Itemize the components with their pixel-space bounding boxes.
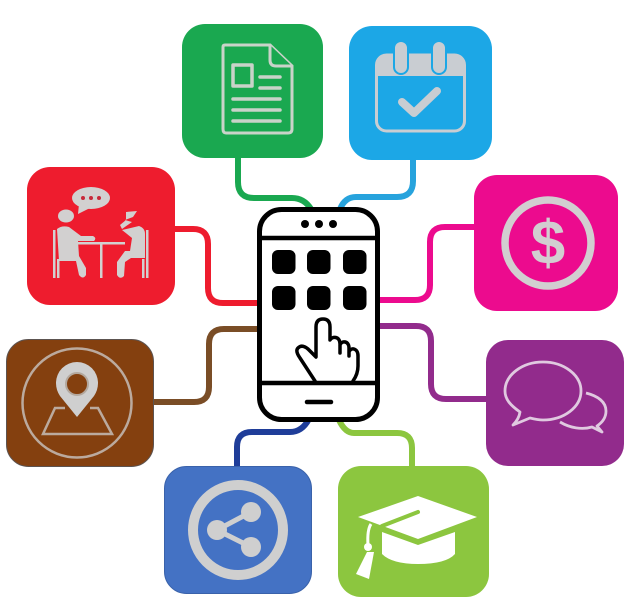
icon: dollar coin: $	[531, 209, 565, 278]
tile: education	[338, 466, 489, 597]
tile: share	[164, 466, 312, 594]
home button	[307, 400, 331, 404]
tile: calendar	[349, 26, 492, 160]
phone speaker dots	[301, 220, 337, 228]
icon: speech bubbles	[505, 362, 606, 432]
connector: location tile to phone	[152, 329, 260, 402]
connector: payment tile to phone	[378, 227, 476, 300]
connector: document tile to phone	[238, 156, 311, 209]
connector: meeting tile to phone	[173, 229, 260, 303]
tile: chat	[486, 340, 624, 466]
icon: document	[223, 45, 292, 133]
connector: share tile to phone	[237, 419, 309, 468]
icon: graduation cap	[356, 496, 477, 579]
connector: chat tile to phone	[378, 326, 488, 399]
connector: calendar tile to phone	[340, 158, 413, 209]
tile: location	[6, 340, 154, 466]
tile: meeting	[27, 167, 175, 305]
icon: two people talking at a table	[53, 187, 148, 278]
icon: dollar coin	[505, 200, 591, 286]
connector: education tile to phone	[339, 420, 412, 468]
phone	[260, 210, 378, 420]
tile: document	[182, 24, 323, 158]
app icon grid	[272, 250, 366, 310]
icon: calendar with check	[376, 41, 464, 131]
icon: map pin in circle	[22, 348, 132, 458]
icon: tapping hand	[297, 319, 358, 381]
tile: payment	[474, 175, 618, 311]
icon: share symbol in circle	[193, 485, 283, 575]
